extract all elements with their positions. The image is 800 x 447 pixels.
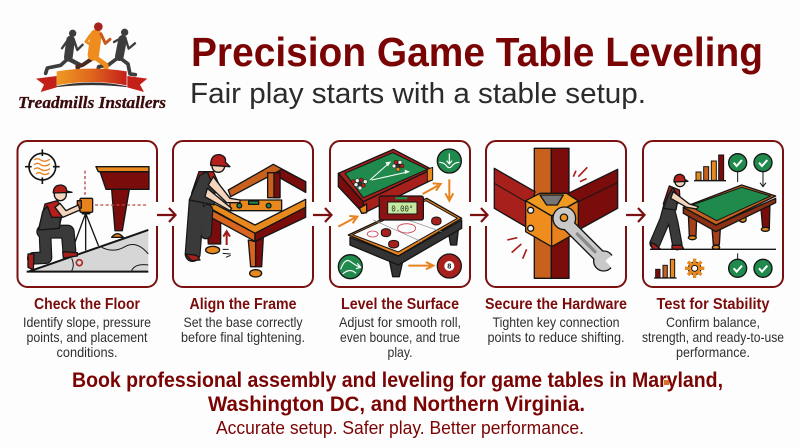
arrow: step 2 to 3 [313, 208, 332, 222]
icon: right rail [568, 169, 618, 230]
orange speck on call to action [664, 380, 669, 385]
icon: pool table under test [683, 185, 776, 249]
step 4 caption: Tighten key connection [492, 315, 620, 330]
step 4 caption: Secure the Hardware [485, 296, 627, 313]
icon: eight ball: 8 [447, 262, 451, 271]
laser guide lines [85, 171, 148, 271]
icon: up arrow [223, 231, 230, 245]
icon: small bar chart [654, 259, 677, 278]
logo: Treadmills Installers [18, 22, 166, 112]
icon: ribbon banner [36, 69, 147, 92]
step 3 caption: even bounce, and true [340, 330, 460, 345]
step 5 caption: performance. [676, 345, 750, 360]
panel: align the frame [173, 141, 313, 287]
step 5 caption: strength, and ready-to-use [642, 330, 784, 345]
panel: secure the hardware [486, 141, 626, 287]
call to action [72, 369, 723, 438]
step 1 caption: points, and placement [26, 330, 148, 345]
call to action: Accurate setup. Safer play. Better performance. [216, 418, 584, 438]
step 3 caption: play. [388, 345, 412, 360]
icon: kneeling technician [28, 185, 80, 270]
icon: left rail [494, 168, 535, 227]
adjust marks [223, 249, 231, 257]
icon: floor scan target [25, 149, 60, 184]
panel: level the surface [330, 141, 470, 287]
arrows: orange flow [338, 179, 453, 269]
icon: tester pushing table [650, 174, 698, 249]
icon: left grey runner [46, 30, 83, 73]
arrow: step 4 to 5 [626, 208, 644, 222]
icon: corner bracket [526, 193, 578, 247]
step 3 caption: Adjust for smooth roll, [339, 315, 461, 330]
icon: billiard balls [351, 160, 409, 190]
step 4 caption: points to reduce shifting. [488, 330, 624, 345]
icon: gear [685, 259, 704, 278]
step 2 caption: Align the Frame [190, 296, 297, 313]
icon: surface check badge [437, 149, 461, 173]
tightening spark marks [507, 167, 587, 259]
arrow: step 3 to 4 [470, 208, 488, 222]
step 2 caption: before final tightening. [181, 330, 305, 345]
icon: sloped floor [27, 230, 148, 272]
subtitle: Fair play starts with a stable setup. [190, 78, 646, 110]
call to action: Washington DC, and Northern Virginia. [208, 393, 585, 416]
step 4 caption [485, 296, 627, 345]
step 3 caption [339, 296, 461, 360]
arrow: step 1 to 2 [157, 208, 176, 222]
call to action: Book professional assembly and leveling for game tables in Maryland, [72, 369, 723, 392]
icon: rising bar chart [694, 155, 726, 181]
step 1 caption: conditions. [56, 345, 118, 360]
icon: installer leaning on frame [185, 155, 240, 261]
icon: smooth roll badge [338, 255, 362, 279]
step 3 caption: Level the Surface [341, 296, 459, 313]
floor line [650, 247, 776, 251]
title: Precision Game Table Leveling [191, 29, 763, 75]
step 2 caption [181, 296, 305, 345]
panel: check the floor [18, 141, 157, 287]
step 5 caption: Confirm balance, [666, 315, 760, 330]
step 1 caption: Identify slope, pressure [23, 315, 151, 330]
icon: table frame [202, 164, 306, 277]
icon: orange center runner [77, 22, 111, 77]
icon: table corner [96, 167, 149, 237]
icon: wrench [553, 207, 620, 271]
icon: top check badges [729, 154, 772, 187]
icon: air hockey table [348, 198, 462, 277]
icon: right grey runner [97, 29, 135, 75]
logo wordmark: Treadmills Installers [18, 93, 166, 112]
step 5 caption [642, 296, 784, 360]
step 1 caption: Check the Floor [34, 296, 140, 313]
icon: vertical post [534, 148, 569, 278]
icon: digital level readout: 0.00° [391, 205, 413, 215]
icon: pool table [338, 149, 433, 213]
step 2 caption: Set the base correctly [184, 315, 303, 330]
icon: spirit level [230, 200, 282, 211]
icon: bottom check badges [729, 253, 772, 277]
icon: tripod laser level [73, 198, 98, 250]
step 5 caption: Test for Stability [656, 296, 770, 313]
step 1 caption [23, 296, 151, 360]
panel: test for stability [643, 141, 783, 287]
